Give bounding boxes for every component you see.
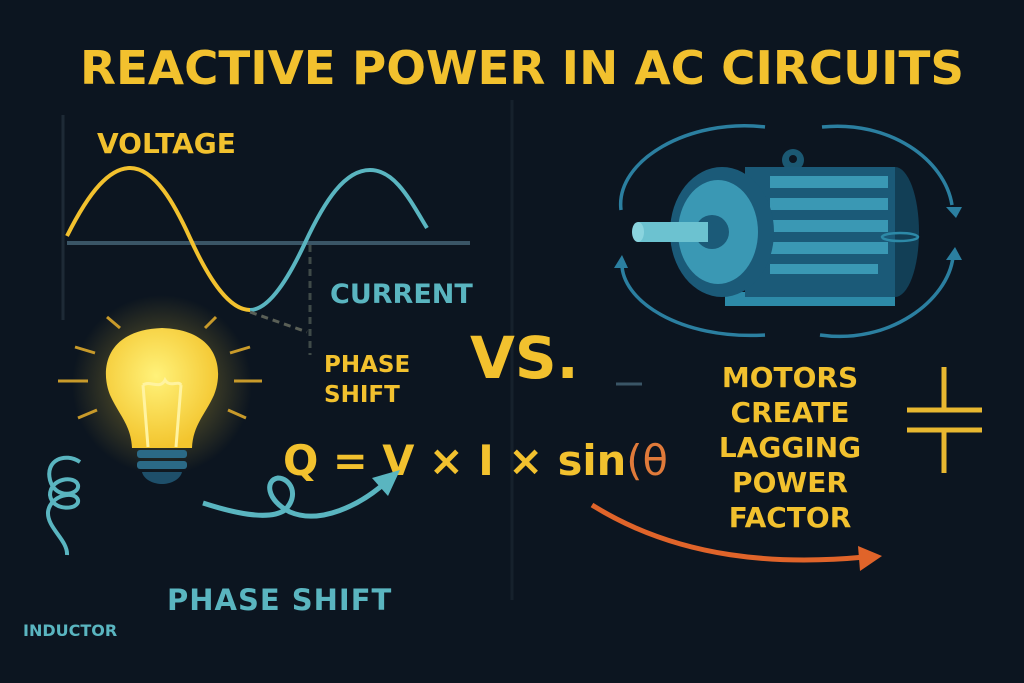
icon: motor with field arcs (614, 126, 962, 336)
label: inductor: INDUCTOR (23, 621, 117, 640)
text: motors create lagging power factor: CREATE (731, 396, 849, 429)
label: voltage: VOLTAGE (97, 127, 236, 160)
text: motors create lagging power factor: LAGGING (719, 431, 861, 464)
wave chart (67, 168, 470, 355)
arrow: phase shift teal (203, 470, 400, 516)
label: phase shift: PHASE SHIFT (167, 583, 392, 617)
label: phase shift (wave): PHASE (324, 352, 410, 378)
formula: Q = V × I × sin(θ (283, 436, 668, 485)
arrow: orange (592, 505, 882, 571)
text: motors create lagging power factor: FACTOR (729, 501, 851, 534)
icon: inductor coil (48, 458, 80, 555)
icon: light bulb (58, 295, 262, 484)
label: phase shift (wave): SHIFT (324, 382, 400, 408)
text: motors create lagging power factor: POWER (732, 466, 848, 499)
vs: VS. (470, 324, 579, 392)
icon: capacitor (907, 367, 982, 473)
text: motors create lagging power factor: MOTORS (722, 361, 858, 394)
title: REACTIVE POWER IN AC CIRCUITS (80, 41, 964, 95)
label: current: CURRENT (330, 279, 473, 310)
